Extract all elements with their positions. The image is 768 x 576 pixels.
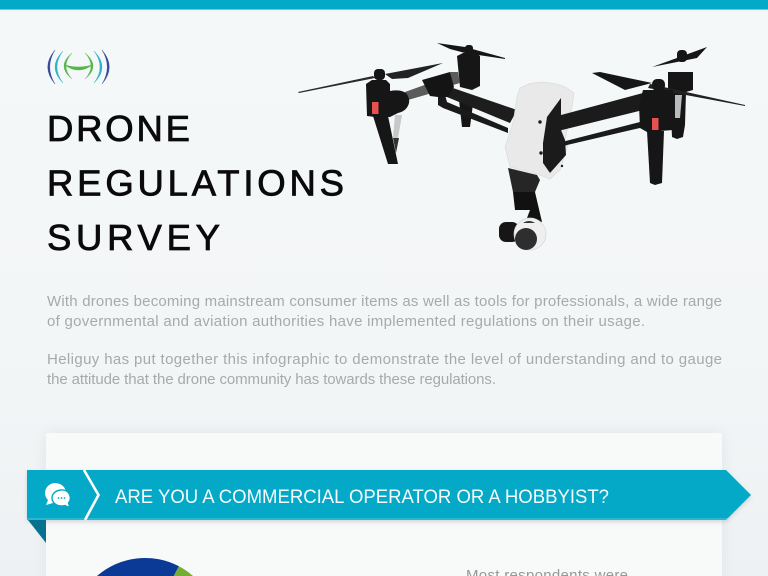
title: [47, 108, 344, 258]
camera gimbal: [499, 168, 546, 250]
section banner: [27, 470, 751, 543]
intro text: the attitude that the drone community has towards these regulations.: [47, 371, 496, 388]
title: DRONE: [47, 108, 190, 149]
intro text: [47, 293, 722, 388]
right arms: [538, 93, 643, 173]
title: REGULATIONS: [47, 162, 344, 204]
top bar: [0, 0, 768, 10]
intro text: Heliguy has put together this infographic to demonstrate the level of understanding and to gauge: [47, 351, 722, 368]
icon: heliguy logo: [48, 50, 109, 84]
drone illustration: [298, 43, 745, 250]
title: SURVEY: [47, 217, 220, 258]
intro text: of governmental and aviation authorities have implemented regulations on their usage.: [47, 313, 645, 330]
right rotors and motors: [592, 47, 745, 185]
banner heading: ARE YOU A COMMERCIAL OPERATOR OR A HOBBYIST?: [115, 486, 609, 508]
back left rotor and motor: [437, 43, 505, 127]
pie chart: [97, 558, 193, 576]
chevron divider: [84, 470, 98, 520]
body shell: [505, 82, 574, 179]
intro text: With drones becoming mainstream consumer items as well as tools for professionals, a wide range: [47, 293, 722, 310]
left rotor and motor: [298, 63, 443, 164]
left arms: [405, 72, 517, 133]
icon: speech bubbles: [45, 483, 70, 508]
panel: commercial or hobbyist: [46, 433, 722, 576]
